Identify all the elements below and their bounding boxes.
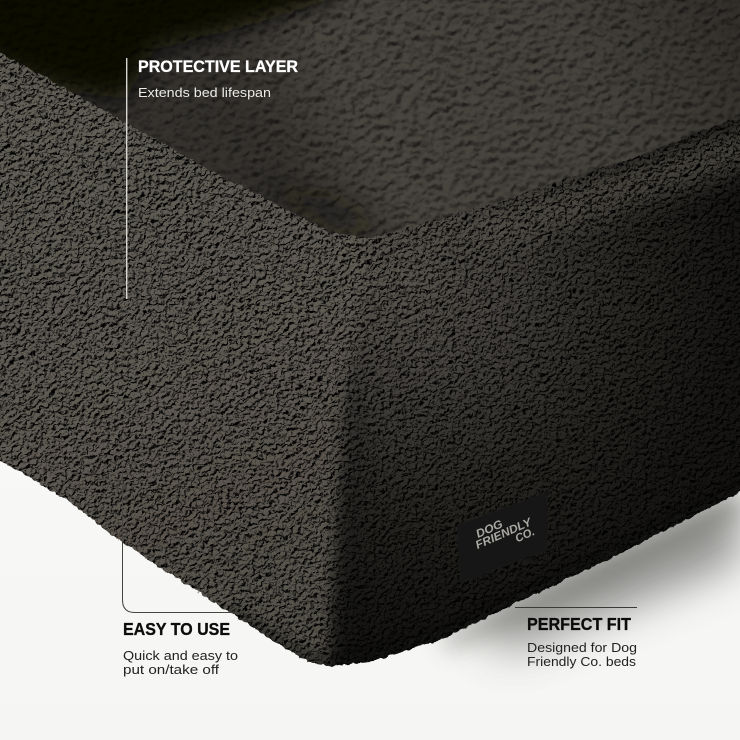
heading: PROTECTIVE LAYER — [138, 58, 298, 76]
floor texture — [0, 0, 740, 260]
callout: easy to use — [122, 470, 242, 677]
right wall — [318, 118, 740, 667]
label text — [470, 507, 539, 561]
callout: perfect fit — [515, 608, 641, 669]
leader line — [515, 606, 637, 608]
leader line — [126, 58, 127, 299]
underside shading — [227, 604, 338, 667]
dark back of bed — [0, 0, 350, 100]
label text: DOG — [474, 518, 505, 541]
heading: EASY TO USE — [123, 619, 230, 639]
description: Quick and easy to — [123, 648, 238, 663]
right wall top rim light — [486, 118, 740, 242]
corner crease shading — [349, 388, 362, 448]
leader line — [122, 470, 232, 612]
shaded inner corner — [250, 178, 385, 232]
label text: FRIENDLY — [474, 516, 535, 552]
heading: PERFECT FIT — [527, 614, 631, 634]
description: Designed for Dog — [527, 640, 637, 655]
description: Friendly Co. beds — [527, 654, 637, 669]
callout: protective layer — [126, 58, 298, 299]
brand label — [457, 492, 547, 583]
label patch — [457, 492, 547, 583]
floor shadow — [440, 492, 740, 650]
label text: CO. — [514, 526, 537, 545]
left wall — [0, 52, 370, 666]
description: put on/take off — [123, 662, 219, 677]
bed interior floor — [0, 0, 740, 260]
description: Extends bed lifespan — [138, 85, 271, 100]
